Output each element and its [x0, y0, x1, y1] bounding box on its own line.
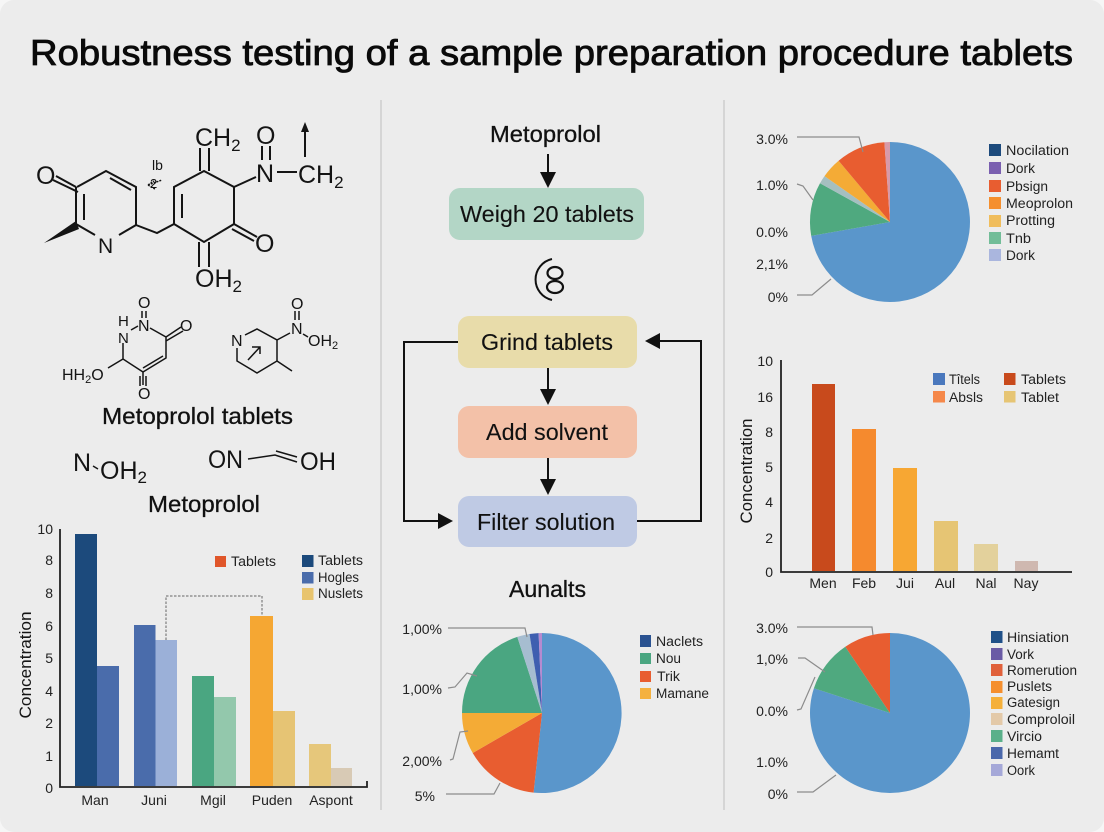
y axis labels: 2	[45, 715, 53, 731]
legend: Vork	[1007, 647, 1034, 662]
x axis labels: Men	[809, 575, 837, 591]
panel: top right pie chart	[756, 131, 1073, 305]
bar chart: left concentration	[16, 521, 367, 808]
small molecule left: O	[91, 367, 104, 384]
legend: Tablets	[1021, 372, 1066, 387]
arrow: solvent to filter	[540, 458, 556, 495]
fragment: N-OH2	[73, 449, 147, 487]
small molecule right	[231, 296, 338, 373]
percentage labels: 1.0%	[756, 754, 788, 770]
pie	[462, 633, 622, 793]
y axis labels	[37, 521, 53, 796]
x axis labels: Juni	[141, 792, 167, 808]
percentage labels: 1,00%	[402, 681, 442, 697]
legend	[991, 630, 1077, 778]
legend: Oork	[1007, 763, 1035, 778]
percentage labels: 0%	[768, 289, 788, 305]
step: grind tablets	[458, 316, 637, 368]
title: Robustness testing of a sample preparation procedure tablets	[30, 32, 1073, 73]
y axis labels: 10	[757, 353, 773, 369]
y axis labels: 6	[45, 618, 53, 634]
y axis labels: 4	[765, 494, 773, 510]
main molecule structure: 2	[150, 176, 157, 191]
y axis labels: 4	[45, 683, 53, 699]
x axis labels	[809, 575, 1038, 591]
y axis labels: 8	[45, 585, 53, 601]
x axis labels	[81, 792, 353, 808]
arrow: start to weigh	[540, 154, 556, 188]
small molecule left: O	[138, 295, 150, 312]
label: metoprolol: Metoprolol	[148, 491, 260, 517]
fragment: ON=OH	[208, 446, 336, 476]
arrow: grind to solvent	[540, 368, 556, 405]
legend: Hinsiation	[1007, 630, 1069, 645]
x axis labels: Man	[81, 792, 109, 808]
small molecule right: N	[231, 333, 243, 350]
legend: Absls	[949, 390, 983, 405]
step: filter solution: Filter solution	[477, 509, 615, 535]
percentage labels: 5%	[415, 788, 435, 804]
step: grind tablets: Grind tablets	[481, 329, 613, 355]
legend: Comproloil	[1007, 712, 1075, 727]
main molecule structure: lb	[152, 157, 163, 173]
panel: chemical structures	[36, 122, 344, 517]
legend: Nuslets	[318, 586, 363, 601]
percentage labels: 2,00%	[402, 753, 442, 769]
y axis labels: 10	[37, 521, 53, 537]
fragment: N-OH2: N	[73, 449, 91, 477]
percentage labels: 1.0%	[756, 177, 788, 193]
legend	[640, 634, 709, 701]
step: add solvent	[458, 406, 637, 458]
percentage labels: 0.0%	[756, 703, 788, 719]
legend: Romerution	[1007, 663, 1077, 678]
y axis labels: 1	[45, 748, 53, 764]
legend	[215, 553, 363, 601]
small molecule left	[62, 295, 192, 403]
legend: Tablets	[231, 554, 276, 569]
y axis labels: 8	[765, 424, 773, 440]
main molecule structure	[36, 122, 344, 296]
percentage labels: 0.0%	[756, 224, 788, 240]
heading: Aunalts	[509, 576, 586, 602]
axes	[60, 529, 367, 787]
x axis labels: Puden	[252, 792, 292, 808]
legend: Naclets	[656, 634, 703, 649]
main molecule structure: O	[256, 122, 275, 150]
main molecule structure: 2	[232, 277, 242, 296]
panel: aunalts pie chart	[402, 576, 709, 804]
y axis labels: 5	[765, 459, 773, 475]
percentage labels: 3.0%	[756, 131, 788, 147]
percentage labels	[402, 621, 442, 804]
x axis labels: Aspont	[309, 792, 353, 808]
legend: Nocilation	[1006, 143, 1069, 158]
icon: swirl	[536, 259, 563, 300]
legend: Gatesign	[1007, 695, 1060, 710]
fragment: N-OH2: OH	[100, 457, 138, 485]
small molecule left: O	[138, 386, 150, 403]
legend: Tablets	[318, 553, 363, 568]
axes	[781, 360, 1072, 572]
percentage labels	[756, 620, 788, 802]
panel: flowchart	[404, 121, 701, 547]
y axis labels: 5	[45, 650, 53, 666]
legend: Pbsign	[1006, 179, 1048, 194]
pie	[810, 633, 970, 793]
bars	[75, 534, 352, 786]
legend: Meoprolon	[1006, 196, 1073, 211]
legend: Nou	[656, 651, 681, 666]
arrow: left loop	[404, 342, 458, 529]
legend: Dork	[1006, 248, 1035, 263]
label: metoprolol tablets: Metoprolol tablets	[102, 403, 293, 429]
step: weigh 20 tablets	[449, 188, 644, 240]
y axis labels: 2	[765, 530, 773, 546]
legend: Tîtels	[949, 372, 980, 387]
percentage labels	[756, 131, 788, 305]
pie	[810, 142, 970, 302]
step: weigh 20 tablets: Weigh 20 tablets	[460, 201, 634, 227]
main molecule structure: 2	[231, 136, 241, 155]
small molecule left: N	[118, 330, 129, 347]
main molecule structure: N	[98, 235, 113, 258]
small molecule left: HH	[62, 367, 85, 384]
x axis labels: Nal	[975, 575, 997, 591]
bars	[812, 384, 1038, 571]
percentage labels: 0%	[768, 786, 788, 802]
arrow: right loop	[637, 333, 701, 521]
bar chart: right concentration	[737, 353, 1072, 591]
y axis labels: 16	[757, 389, 773, 405]
main molecule structure: O	[36, 162, 55, 190]
legend: Mamane	[656, 686, 709, 701]
small molecule right: O	[291, 296, 303, 313]
y axis labels	[757, 353, 773, 580]
small molecule right: OH	[308, 333, 332, 350]
percentage labels: 1,00%	[402, 621, 442, 637]
y axis labels: 0	[45, 780, 53, 796]
leader lines	[797, 137, 863, 295]
main molecule structure: O	[255, 230, 274, 258]
fragment: ON=OH: ON	[208, 446, 243, 474]
percentage labels: 2,1%	[756, 256, 788, 272]
y axis title: Concentration	[16, 612, 35, 718]
legend: Vircio	[1007, 729, 1042, 744]
leader lines	[446, 628, 527, 794]
legend	[989, 143, 1073, 263]
small molecule right: N	[291, 321, 303, 338]
small molecule left: 2	[85, 374, 91, 386]
percentage labels: 1,0%	[756, 651, 788, 667]
legend: Protting	[1006, 213, 1055, 228]
legend: Tnb	[1006, 231, 1031, 246]
main molecule structure: N	[256, 160, 274, 188]
main molecule structure: CH	[298, 161, 334, 189]
x axis labels: Jui	[896, 575, 914, 591]
step: add solvent: Add solvent	[486, 419, 609, 445]
fragment: N-OH2: 2	[138, 468, 147, 487]
main molecule structure: 2	[334, 173, 344, 192]
legend: Hogles	[318, 570, 359, 585]
y axis title: Concentration	[737, 418, 756, 524]
small molecule right: 2	[332, 340, 338, 352]
main molecule structure: OH	[195, 265, 232, 293]
small molecule left: N	[138, 318, 150, 335]
x axis labels: Feb	[852, 575, 876, 591]
legend: Tablet	[1021, 390, 1059, 405]
x axis labels: Aul	[935, 575, 955, 591]
x axis labels: Nay	[1014, 575, 1038, 591]
main molecule structure: CH	[195, 124, 231, 152]
fragment: ON=OH: OH	[300, 448, 336, 476]
step: filter solution	[458, 496, 637, 547]
legend: Hemamt	[1007, 746, 1059, 761]
x axis labels: Mgil	[200, 792, 226, 808]
dashed connector	[166, 596, 262, 640]
legend: Dork	[1006, 161, 1035, 176]
flow start label: Metoprolol	[490, 121, 601, 147]
legend: Trik	[657, 669, 680, 684]
legend	[933, 372, 1066, 405]
panel: bottom right pie chart	[756, 620, 1077, 802]
legend: Puslets	[1007, 679, 1052, 694]
small molecule left: H	[118, 313, 129, 330]
small molecule left: O	[180, 318, 192, 335]
y axis labels: 8	[45, 552, 53, 568]
leader lines	[797, 627, 873, 792]
y axis labels: 0	[765, 564, 773, 580]
percentage labels: 3.0%	[756, 620, 788, 636]
